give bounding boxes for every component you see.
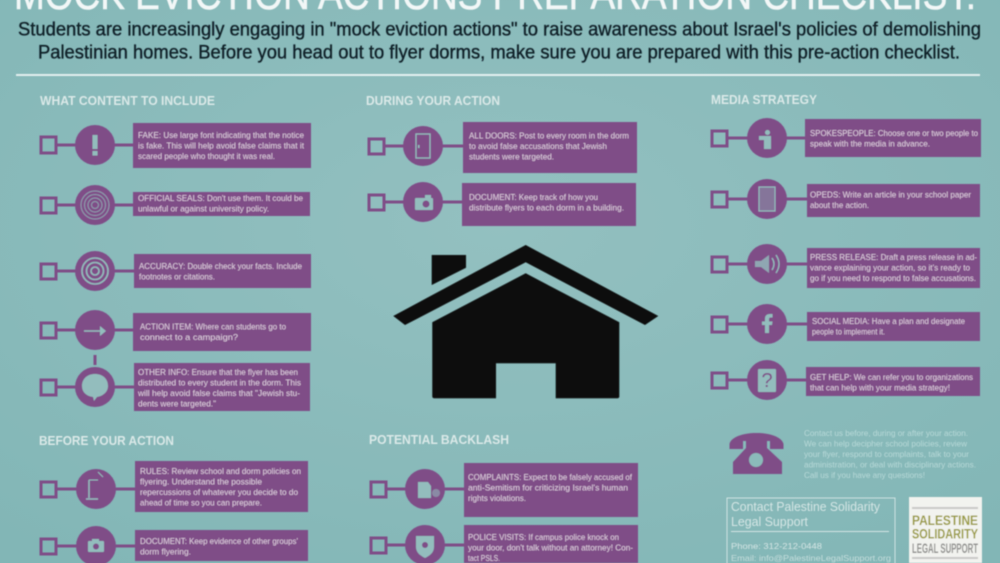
intro text: Students are increasingly engaging in "mock eviction actions" to raise awareness about Israel's policies of demolishing — [18, 20, 981, 40]
item: complaints: anti-Semitism for criticizing Israel's human — [468, 482, 628, 492]
text block: contact note: your flyer, respond to complaints, talk to your — [804, 449, 969, 459]
item: other info: dents were targeted." — [138, 398, 216, 408]
item: complaints: rights violations. — [468, 493, 526, 503]
item: all doors: students were targeted. — [469, 152, 554, 162]
item: press release: PRESS RELEASE: Draft a press release in ad- — [810, 252, 977, 262]
heading: before your action: BEFORE YOUR ACTION — [39, 433, 174, 448]
panel: potential backlash — [369, 432, 638, 563]
text block: contact note: administration, or deal with disciplinary actions. — [804, 460, 976, 470]
heading: media strategy: MEDIA STRATEGY — [711, 92, 817, 107]
item: rules — [41, 461, 308, 512]
panel: during your action — [366, 93, 637, 226]
panel: media strategy — [711, 92, 981, 400]
item: official seals: OFFICIAL SEALS: Don't use them. It could be — [138, 193, 303, 203]
item: opeds: about the action. — [810, 200, 869, 210]
item: get help: that can help with your media strategy! — [810, 382, 950, 392]
item: fake: is fake. This will help avoid false claims that it — [138, 140, 305, 150]
item: rules: RULES: Review school and dorm policies on — [140, 466, 301, 476]
item: fake: scared people who thought it was real. — [138, 151, 275, 161]
item: spokespeople — [712, 118, 981, 158]
item: rules: repercussions of whatever you decide to do — [140, 487, 298, 497]
item: social media — [712, 304, 980, 344]
item: accuracy — [41, 251, 311, 291]
item: document: dorm flyering. — [140, 546, 191, 556]
item: other info: distributed to every student in the dorm. This — [138, 378, 301, 388]
panel: contact box: Email: info@PalestineLegalSupport.org — [731, 553, 891, 563]
text block: contact note: Contact us before, during or after your action. — [804, 428, 968, 438]
item: action item — [41, 310, 311, 351]
heading: what content to include: WHAT CONTENT TO INCLUDE — [40, 93, 215, 108]
item: fake — [41, 123, 311, 168]
logo: Palestine Solidarity Legal Support: PALESTINE — [912, 513, 978, 528]
logo: Palestine Solidarity Legal Support: SOLIDARITY — [912, 526, 978, 542]
text block: contact note — [804, 428, 976, 480]
item: spokespeople: speak with the media in advance. — [810, 138, 930, 148]
text block: contact note: Call us if you have any questions! — [804, 470, 925, 480]
item: police visits — [371, 525, 638, 563]
item: fake: FAKE: Use large font indicating that the notice — [138, 130, 304, 140]
intro text: Palestinian homes. Before you head out to flyer dorms, make sure you are prepared with this pre-action checklist. — [38, 42, 960, 64]
item: accuracy: ACCURACY: Double check your facts. Include — [139, 261, 302, 271]
item: document: distribute flyers to each dorm in a building. — [469, 202, 624, 212]
item: other info: OTHER INFO: Ensure that the flyer has been — [138, 367, 298, 377]
item: other info: will help avoid false claims that "Jewish stu- — [137, 388, 300, 398]
item: document — [369, 182, 636, 226]
panel: before your action — [39, 433, 308, 563]
item: official seals — [41, 185, 310, 225]
item: police visits: your door, don't talk without an attorney! Con- — [468, 542, 633, 552]
panel: contact box: Contact Palestine Solidarity — [731, 500, 881, 514]
text block: contact note: We can help decipher school policies, review — [804, 438, 968, 448]
item: police visits: tact PSLS. — [468, 553, 500, 563]
item: get help: GET HELP: We can refer you to organizations — [810, 372, 973, 382]
item: all doors: to avoid false accusations that Jewish — [469, 141, 607, 151]
heading: potential backlash: POTENTIAL BACKLASH — [369, 432, 509, 447]
item: spokespeople: SPOKESPEOPLE: Choose one or two people to — [810, 128, 978, 138]
logo: Palestine Solidarity Legal Support — [909, 497, 982, 563]
intro text — [18, 20, 981, 64]
item: press release: go if you need to respond to false accusations. — [810, 273, 976, 283]
item: action item: ACTION ITEM: Where can students go to — [140, 322, 286, 332]
item: get help: ? — [761, 370, 773, 392]
item: document: DOCUMENT: Keep evidence of other groups' — [140, 536, 298, 546]
item: rules: flyering. Understand the possible — [140, 476, 262, 486]
item: opeds — [712, 179, 980, 219]
item: rules: ahead of time so you can prepare. — [140, 498, 262, 508]
icon: telephone — [730, 433, 784, 474]
item: all doors — [369, 122, 637, 173]
item: accuracy: footnotes or citations. — [139, 272, 215, 282]
item: action item: connect to a campaign? — [140, 332, 238, 342]
item: press release: vance explaining your action, so it's ready to — [810, 262, 970, 272]
item: get help — [712, 360, 980, 400]
item: document: DOCUMENT: Keep track of how you — [469, 192, 598, 202]
icon: house — [393, 245, 658, 398]
heading: during your action: DURING YOUR ACTION — [366, 93, 500, 108]
item: social media: people to implement it. — [812, 326, 885, 336]
panel: what content to include — [40, 93, 311, 411]
item: social media: SOCIAL MEDIA: Have a plan and designate — [812, 316, 965, 326]
item: press release — [712, 244, 980, 288]
item: opeds: OPEDS: Write an article in your school paper — [810, 190, 971, 200]
item: all doors: ALL DOORS: Post to every room in the dorm — [469, 130, 629, 140]
panel: contact box: Phone: 312-212-0448 — [731, 541, 822, 551]
item: official seals: unlawful or against university policy. — [138, 204, 269, 214]
item: police visits: POLICE VISITS: If campus police knock on — [468, 532, 619, 542]
item: document — [41, 526, 308, 563]
item: other info — [41, 355, 310, 411]
item: complaints — [371, 463, 638, 517]
panel: contact box — [727, 498, 895, 563]
panel: contact box: Legal Support — [731, 515, 809, 529]
item: complaints: COMPLAINTS: Expect to be falsely accused of — [468, 472, 633, 482]
